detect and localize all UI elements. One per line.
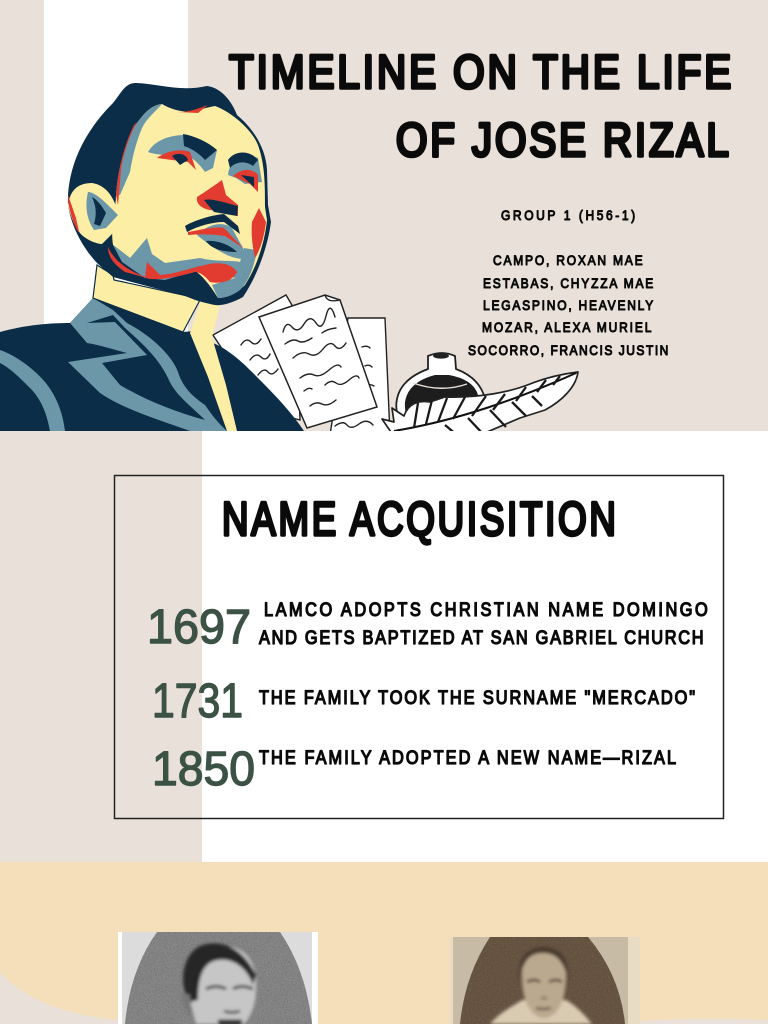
title: OF JOSE RIZAL — [396, 114, 729, 167]
text block: group members: MOZAR, ALEXA MURIEL — [482, 319, 651, 335]
event: 1697 — [259, 599, 708, 648]
panel: middle section background — [0, 431, 768, 862]
text block: group members — [468, 207, 668, 358]
event: 1850: THE FAMILY ADOPTED A NEW NAME—RIZAL — [259, 747, 676, 768]
portrait: eyes and brows — [148, 135, 217, 172]
heading: name acquisition: NAME ACQUISITION — [222, 493, 616, 545]
portrait: coat — [0, 298, 304, 431]
title — [229, 46, 731, 167]
portrait: coat lapel highlights — [0, 298, 227, 431]
illustration: papers — [213, 295, 390, 435]
panel: name acquisition — [114, 476, 724, 818]
photo: mother — [450, 937, 640, 1024]
portrait: collar and shirt — [93, 265, 200, 332]
portrait: jaw shading — [113, 238, 257, 298]
illustration: portrait of Jose Rizal — [0, 83, 304, 431]
year: 1731: 1731 — [152, 675, 243, 728]
portrait: head silhouette and hair — [68, 83, 271, 305]
icon: quill feather — [382, 372, 578, 435]
event: 1697: LAMCO ADOPTS CHRISTIAN NAME DOMINGO — [264, 599, 708, 620]
panel: parents section background — [0, 862, 768, 1024]
year: 1850: 1850 — [152, 743, 255, 796]
text block: group members: SOCORRO, FRANCIS JUSTIN — [468, 342, 668, 358]
year: 1697: 1697 — [147, 601, 251, 654]
event: 1697: AND GETS BAPTIZED AT SAN GABRIEL CHURCH — [259, 627, 704, 648]
event: 1731: THE FAMILY TOOK THE SURNAME "MERCADO" — [259, 687, 695, 708]
portrait: face — [112, 104, 267, 298]
portrait: ear — [68, 183, 118, 248]
panel: header background — [0, 0, 768, 431]
text block: group members: ESTABAS, CHYZZA MAE — [483, 275, 654, 291]
portrait: cheek accent — [252, 208, 266, 258]
text block: group members: GROUP 1 (H56-1) — [501, 207, 635, 223]
title: TIMELINE ON THE LIFE — [229, 46, 731, 99]
text block: group members: CAMPO, ROXAN MAE — [493, 252, 643, 268]
portrait: nose and mouth — [197, 180, 238, 216]
portrait: hairline shading — [116, 104, 162, 195]
photo: father — [118, 932, 318, 1024]
icon: ink bottle — [395, 352, 484, 414]
text block: group members: LEGASPINO, HEAVENLY — [483, 297, 654, 313]
